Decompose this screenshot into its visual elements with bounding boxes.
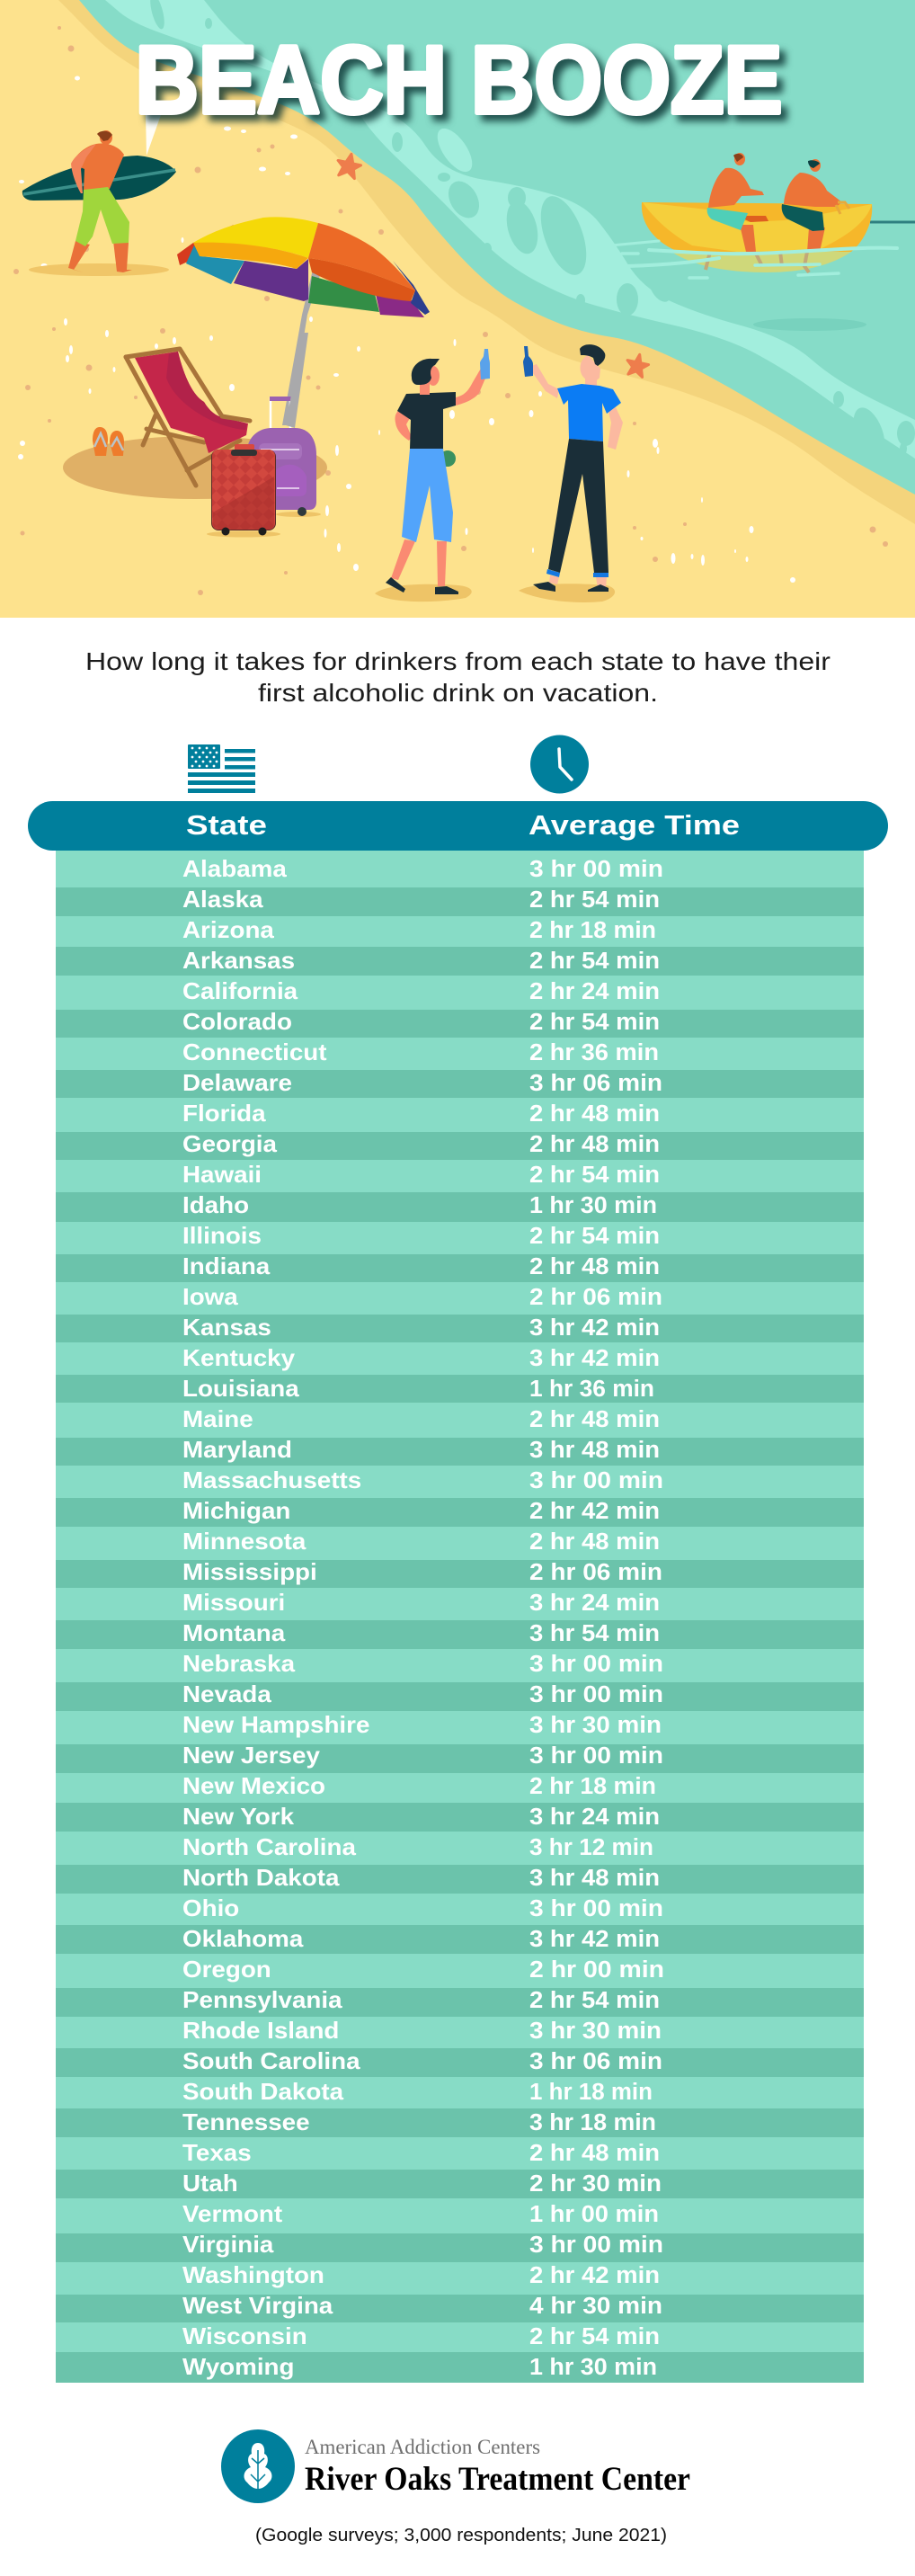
row: Ohio: 3 hr 00 min: [529, 1896, 663, 1921]
row: Nevada: [182, 1681, 663, 1707]
row: Iowa: Iowa: [182, 1284, 238, 1310]
row: Tennessee: [182, 2109, 656, 2135]
row: Ohio: [182, 1895, 663, 1921]
row: Kentucky: Kentucky: [182, 1345, 295, 1371]
row: Oregon: [182, 1957, 664, 1983]
row: Ohio: Ohio: [182, 1895, 239, 1921]
row: South Dakota: South Dakota: [182, 2079, 343, 2105]
row: Alabama: Alabama: [182, 856, 287, 882]
row: Wyoming: 1 hr 30 min: [529, 2355, 657, 2380]
row: Wyoming: [182, 2354, 657, 2380]
right man with bottle: [519, 344, 623, 602]
row: Maryland: 3 hr 48 min: [529, 1438, 660, 1463]
row: Georgia: 2 hr 48 min: [529, 1132, 660, 1157]
row: Illinois: Illinois: [182, 1223, 262, 1249]
row: Alaska: 2 hr 54 min: [529, 887, 660, 913]
row: Alaska: Alaska: [182, 887, 263, 913]
title: BEACH BOOZE: BEACH BOOZE: [135, 25, 782, 133]
row: New Hampshire: 3 hr 30 min: [529, 1713, 662, 1738]
row: North Carolina: [182, 1834, 653, 1860]
row: Utah: Utah: [182, 2170, 238, 2197]
row: New Hampshire: [182, 1712, 662, 1738]
row: Oklahoma: Oklahoma: [182, 1926, 303, 1952]
row: Virginia: Virginia: [182, 2232, 274, 2258]
row: Florida: Florida: [182, 1101, 266, 1127]
icon: clock: [530, 735, 589, 793]
row: Wisconsin: 2 hr 54 min: [529, 2324, 660, 2349]
logo: River Oaks Treatment Center: American Addiction Centers: [305, 2436, 540, 2458]
row: Washington: Washington: [182, 2262, 324, 2288]
foam blobs: [147, 0, 915, 463]
row: Kansas: [182, 1315, 660, 1341]
row: Connecticut: [182, 1039, 659, 1065]
row: North Carolina: North Carolina: [182, 1834, 356, 1860]
row: West Virgina: West Virgina: [182, 2293, 333, 2319]
row: Rhode Island: Rhode Island: [182, 2018, 339, 2044]
row: Louisiana: 1 hr 36 min: [529, 1377, 654, 1402]
row: South Carolina: South Carolina: [182, 2048, 360, 2074]
row: Missouri: Missouri: [182, 1590, 285, 1616]
row: Iowa: [182, 1284, 662, 1310]
row: Arkansas: [182, 948, 660, 974]
row: Maine: [182, 1406, 660, 1432]
table header bar: Average Time: [529, 810, 740, 841]
row: Wisconsin: Wisconsin: [182, 2323, 307, 2349]
row: Wisconsin: [182, 2323, 660, 2349]
row: Louisiana: [182, 1376, 654, 1402]
row: Arkansas: Arkansas: [182, 948, 295, 974]
row: Rhode Island: 3 hr 30 min: [529, 2019, 662, 2044]
subtitle text: [85, 647, 831, 707]
row: Oklahoma: 3 hr 42 min: [529, 1927, 660, 1952]
row: Georgia: [182, 1131, 660, 1157]
row: Virginia: [182, 2232, 663, 2258]
row: South Carolina: 3 hr 06 min: [529, 2049, 662, 2074]
row: Minnesota: [182, 1529, 660, 1555]
surfer with surfboard: [22, 112, 176, 276]
row: Indiana: 2 hr 48 min: [529, 1254, 660, 1279]
flip flops: [93, 427, 124, 456]
row: Delaware: Delaware: [182, 1070, 292, 1096]
row: Tennessee: 3 hr 18 min: [529, 2110, 656, 2135]
row: Minnesota: Minnesota: [182, 1529, 306, 1555]
row: Massachusetts: [182, 1467, 663, 1493]
row: Massachusetts: Massachusetts: [182, 1467, 361, 1493]
row: Colorado: 2 hr 54 min: [529, 1010, 660, 1035]
row: Hawaii: [182, 1162, 660, 1188]
row: Alabama: 3 hr 00 min: [529, 857, 663, 882]
row: Maine: Maine: [182, 1406, 253, 1432]
icon: US flag: [188, 744, 255, 793]
row: Idaho: [182, 1192, 657, 1218]
row: Delaware: [182, 1070, 662, 1096]
sand specks: [13, 26, 888, 595]
row: Washington: [182, 2262, 660, 2288]
row: Arizona: 2 hr 18 min: [529, 918, 656, 943]
row: Pennsylvania: [182, 1987, 660, 2013]
row: Indiana: [182, 1253, 660, 1279]
row: West Virgina: [182, 2293, 662, 2319]
row: Alaska: [182, 887, 660, 913]
row: California: California: [182, 978, 298, 1004]
row: Nevada: 3 hr 00 min: [529, 1682, 663, 1707]
red suitcase: [207, 444, 280, 538]
row: Georgia: Georgia: [182, 1131, 277, 1157]
subtitle text: first alcoholic drink on vacation.: [258, 679, 658, 707]
row: Hawaii: 2 hr 54 min: [529, 1163, 660, 1188]
logo: River Oaks Treatment Center: [221, 2429, 690, 2503]
row: Nevada: Nevada: [182, 1681, 271, 1707]
row: North Dakota: 3 hr 48 min: [529, 1866, 660, 1891]
row: Mississippi: 2 hr 06 min: [529, 1560, 662, 1585]
row: Colorado: [182, 1009, 660, 1035]
table: time to first drink by state: [28, 801, 888, 2383]
row: Michigan: Michigan: [182, 1498, 290, 1524]
subtitle text: How long it takes for drinkers from each state to have their: [85, 647, 831, 675]
purple suitcase: [247, 333, 321, 517]
starfish: [335, 152, 650, 378]
row: Rhode Island: [182, 2018, 662, 2044]
row: Kansas: 3 hr 42 min: [529, 1315, 660, 1341]
row: New York: [182, 1804, 660, 1830]
row: Mississippi: Mississippi: [182, 1559, 317, 1585]
table header bar: [28, 801, 888, 851]
row: Kentucky: 3 hr 42 min: [529, 1346, 660, 1371]
row: Colorado: Colorado: [182, 1009, 292, 1035]
row: Hawaii: Hawaii: [182, 1162, 262, 1188]
row: Vermont: [182, 2201, 659, 2227]
row: Minnesota: 2 hr 48 min: [529, 1529, 660, 1555]
row: New Mexico: 2 hr 18 min: [529, 1774, 656, 1799]
row: Delaware: 3 hr 06 min: [529, 1071, 662, 1096]
row: New Mexico: New Mexico: [182, 1773, 325, 1799]
row: Pennsylvania: 2 hr 54 min: [529, 1988, 660, 2013]
row: Louisiana: Louisiana: [182, 1376, 299, 1402]
row: Indiana: Indiana: [182, 1253, 270, 1279]
row: Missouri: [182, 1590, 660, 1616]
row: Virginia: 3 hr 00 min: [529, 2233, 663, 2258]
row: Texas: 2 hr 48 min: [529, 2141, 660, 2166]
row: Michigan: [182, 1498, 660, 1524]
table header bar: State: [186, 810, 267, 841]
row: Vermont: Vermont: [182, 2201, 282, 2227]
row: Michigan: 2 hr 42 min: [529, 1499, 660, 1524]
row: Arizona: Arizona: [182, 917, 274, 943]
foam: [105, 0, 915, 459]
row: Arizona: [182, 917, 656, 943]
row: Oregon: 2 hr 00 min: [529, 1957, 664, 1983]
row: North Carolina: 3 hr 12 min: [529, 1835, 653, 1860]
row: Illinois: 2 hr 54 min: [529, 1224, 660, 1249]
row: New Jersey: New Jersey: [182, 1743, 320, 1769]
row: New York: 3 hr 24 min: [529, 1805, 660, 1830]
row: Montana: [182, 1620, 660, 1646]
logo mark: oak leaf badge: [221, 2429, 295, 2503]
row: New Mexico: [182, 1773, 656, 1799]
left man with bottle: [375, 349, 490, 602]
row: Texas: [182, 2140, 660, 2166]
row: Idaho: Idaho: [182, 1192, 249, 1218]
row: Utah: 2 hr 30 min: [529, 2171, 662, 2197]
row: New Jersey: 3 hr 00 min: [529, 1743, 663, 1769]
row: Wyoming: Wyoming: [182, 2354, 294, 2380]
row: South Carolina: [182, 2048, 662, 2074]
row: Alabama: [182, 856, 663, 882]
row: Oregon: Oregon: [182, 1957, 271, 1983]
wet sand band: [58, 0, 915, 524]
row: Maryland: Maryland: [182, 1437, 292, 1463]
row: Florida: 2 hr 48 min: [529, 1101, 660, 1127]
logo: River Oaks Treatment Center: River Oaks Treatment Center: [305, 2461, 690, 2498]
row: Kentucky: [182, 1345, 660, 1371]
row: Maine: 2 hr 48 min: [529, 1407, 660, 1432]
sea water: [79, 0, 915, 495]
row: Texas: Texas: [182, 2140, 252, 2166]
row: New Jersey: [182, 1743, 663, 1769]
row: Pennsylvania: Pennsylvania: [182, 1987, 342, 2013]
row: Massachusetts: 3 hr 00 min: [529, 1468, 663, 1493]
row: Nebraska: Nebraska: [182, 1651, 295, 1677]
row: Connecticut: 2 hr 36 min: [529, 1040, 659, 1065]
row: Connecticut: Connecticut: [182, 1039, 327, 1065]
row: Iowa: 2 hr 06 min: [529, 1285, 662, 1310]
row: Illinois: [182, 1223, 660, 1249]
row: Florida: [182, 1101, 660, 1127]
row: Mississippi: [182, 1559, 662, 1585]
banana boat with riders: [611, 153, 915, 278]
table body background: [56, 845, 864, 2383]
hero illustration: beach scene: [0, 0, 915, 618]
row: Vermont: 1 hr 00 min: [529, 2202, 659, 2227]
row: Washington: 2 hr 42 min: [529, 2263, 660, 2288]
sand background: [0, 0, 915, 618]
row: North Dakota: [182, 1865, 660, 1891]
row: Maryland: [182, 1437, 660, 1463]
row: Kansas: Kansas: [182, 1315, 271, 1341]
deck chair: [63, 349, 327, 499]
row: Nebraska: 3 hr 00 min: [529, 1652, 663, 1677]
row: South Dakota: [182, 2079, 653, 2105]
row: California: [182, 978, 660, 1004]
row: Idaho: 1 hr 30 min: [529, 1193, 657, 1218]
row: Montana: 3 hr 54 min: [529, 1621, 660, 1646]
row: West Virgina: 4 hr 30 min: [529, 2294, 662, 2319]
row: New York: New York: [182, 1804, 294, 1830]
row: Utah: [182, 2170, 662, 2197]
row: Montana: Montana: [182, 1620, 285, 1646]
row: Nebraska: [182, 1651, 663, 1677]
row: New Hampshire: New Hampshire: [182, 1712, 369, 1738]
row: Missouri: 3 hr 24 min: [529, 1591, 660, 1616]
row: Arkansas: 2 hr 54 min: [529, 949, 660, 974]
row: Oklahoma: [182, 1926, 660, 1952]
row: California: 2 hr 24 min: [529, 979, 660, 1004]
row: Tennessee: Tennessee: [182, 2109, 310, 2135]
row: North Dakota: North Dakota: [182, 1865, 340, 1891]
row: South Dakota: 1 hr 18 min: [529, 2080, 653, 2105]
source note: (Google surveys; 3,000 respondents; June 2021): [255, 2525, 667, 2545]
beach umbrella: [177, 217, 430, 425]
